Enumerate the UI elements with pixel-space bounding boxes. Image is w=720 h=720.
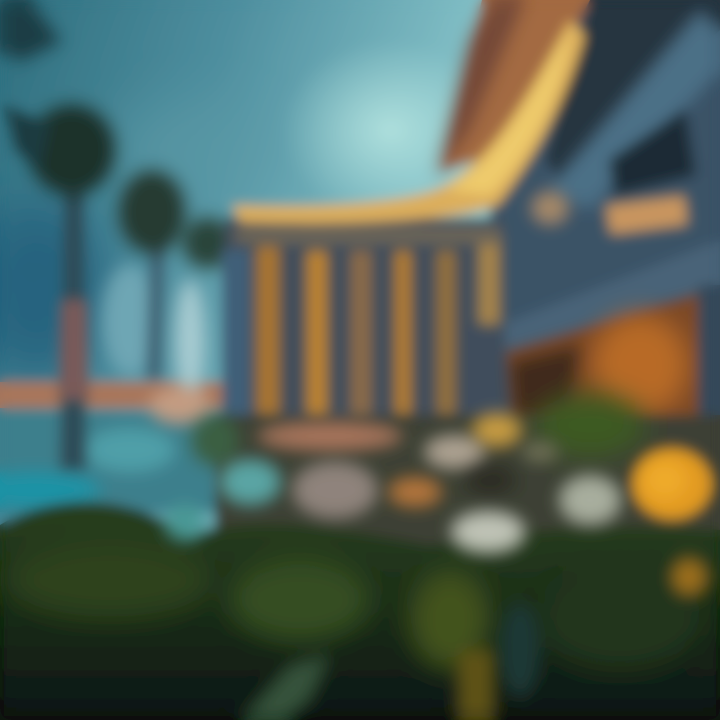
foreground foliage [0,393,720,720]
palm trees [0,0,234,470]
curved roof with glowing band [232,0,590,223]
icon: orange blossoms [632,448,712,596]
facade orange columns [256,235,500,415]
right building [490,0,720,460]
central building facade [222,218,505,433]
water and horizon [0,265,230,512]
terrace band behind flowers [215,415,720,545]
pool and flowers cluster [165,414,620,552]
